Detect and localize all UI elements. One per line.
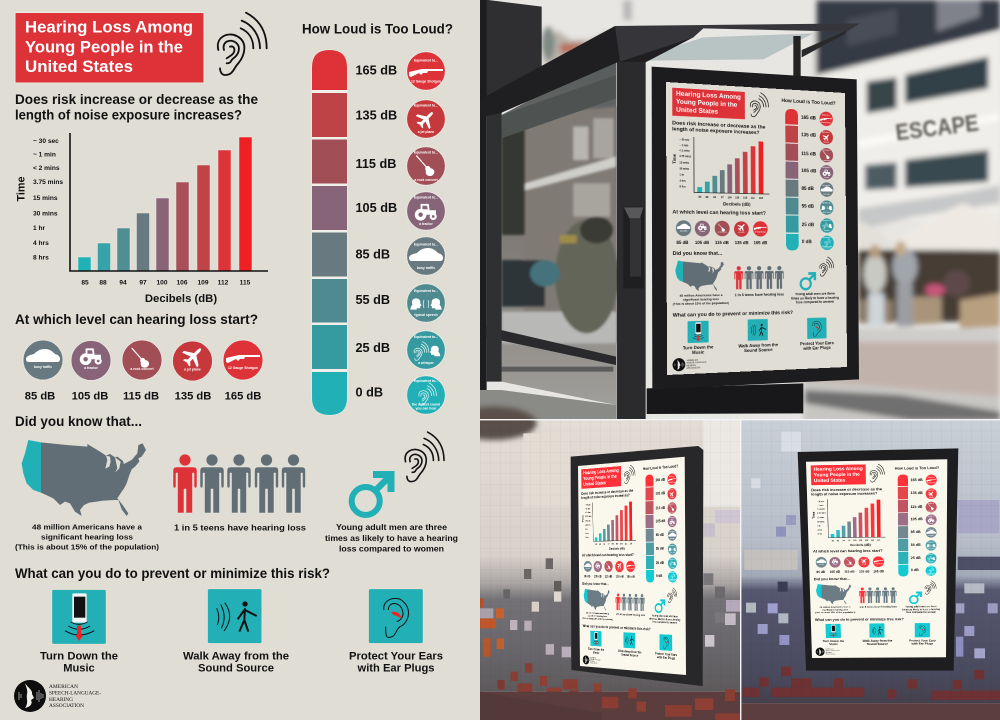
circle: car [407,237,445,275]
people pictogram [173,454,306,513]
circle: speech: typical speech [414,313,438,317]
decibel labels: 0 dB [356,386,383,400]
fact: men text [325,523,458,554]
circle: guitar: a rock concert [414,178,438,182]
main infographic poster [0,0,480,720]
circle: jet plane: a jet plane [418,130,434,134]
circle: jet plane [407,100,445,138]
title: Young People in the [25,38,183,56]
logo text: ASSOCIATION [49,703,84,709]
y axis labels: 8 hrs [33,254,49,261]
y axis labels: 4 hrs [33,240,49,247]
equivalents: loudness circles [407,52,445,414]
decibel labels: 25 dB [356,341,390,355]
axes [70,133,268,271]
y axis labels: 3.75 mins [33,179,63,186]
x axis labels: 100 [156,280,168,286]
y axis labels: 1 hr [33,225,46,232]
decibel thermometer scale [312,50,348,416]
circle: softest sound: you can hear [416,406,437,410]
circle: speech: Equivalent to... [414,289,438,293]
circle: shotgun: Equivalent to... [414,58,438,62]
poster frame right [798,448,958,671]
fact: men text: loss compared to women [339,544,444,554]
panel: walk away [183,589,289,674]
level: rock concert [122,340,162,380]
bar chart: exposure time by decibels [16,133,268,305]
icon: ear with sound waves [218,13,267,75]
heading: risk question: length of noise exposure increases? [15,108,242,122]
x axis labels: 88 [99,280,107,286]
panel: walk away: Sound Source [198,662,274,674]
circle: tractor: a tractor [419,222,433,226]
x axis labels: 112 [218,280,229,286]
logo: ASHA [14,680,101,712]
mock poster: beige tile wall [578,456,686,675]
y axis labels [33,138,63,261]
mock poster: bus shelter [666,82,847,375]
y axis labels: 15 mins [33,195,58,202]
level decibel labels: 115 dB [123,390,159,402]
panel: walk away: Walk Away from the [183,650,289,662]
heading: risk question: Does risk increase or decrease as the [15,92,258,107]
y axis labels: < 2 mins [33,165,60,172]
y axis labels: ~ 1 min [33,152,56,159]
mock poster: blue tile wall [806,459,948,658]
circle: jet plane: Equivalent to... [414,104,438,108]
circle: whisper: a whisper [418,361,435,365]
level: rock concert: a rock concert [130,367,154,371]
poster frame left [571,446,703,686]
distant building [817,32,1000,220]
decibel labels [356,64,397,400]
fact: map text: significant hearing loss [41,532,133,542]
building lettering: ESCAPE [894,110,980,146]
icon: ear [405,432,444,482]
x axis title: Decibels (dB) [145,293,217,305]
heading: risk question [15,92,258,122]
x axis labels: 94 [119,280,127,286]
circle: softest sound [407,376,445,414]
poster frame [647,383,803,414]
icon: phone with arrow [52,589,106,644]
panel: ear plugs [349,589,443,674]
scene: tiled wall with blue tones [741,420,1000,720]
level decibel labels: 85 dB [25,390,55,402]
logo text: AMERICAN [49,684,78,690]
circle: shotgun: 12 Gauge Shotgun [411,80,441,84]
shelter side glass [480,0,618,420]
icon: person walking from sound [207,589,262,644]
bars [78,137,252,271]
fact: map text: 48 million Americans have a [32,522,143,532]
heading: prevention: What can you do to prevent or minimize this risk? [15,566,330,581]
panel: turn down the music [40,589,118,674]
x axis labels: 115 [240,280,251,286]
heading: how loud: How Loud is Too Loud? [302,22,453,36]
panel: turn down the music: Music [63,662,95,674]
heading: did you know: Did you know that... [15,414,142,429]
heading: level: At which level can hearing loss start? [15,312,258,327]
circle: softest sound: the softest sound [412,402,440,406]
circle: tractor [407,192,445,230]
level: shotgun [223,340,263,380]
y axis labels: ~ 30 sec [33,138,59,145]
y axis title: Time [16,176,28,202]
icon: male symbol [352,471,394,515]
decibel labels: 135 dB [356,108,397,122]
scene: tiled wall with beige tones [450,407,740,720]
logo text [49,684,101,709]
level: tractor: a tractor [84,366,98,370]
fact: teens text: 1 in 5 teens have hearing loss [174,522,306,532]
shelter roof [646,33,813,61]
panel: ear plugs: Protect Your Ears [349,650,443,662]
level: jet plane [172,341,212,381]
circle: car: Equivalent to... [414,242,438,246]
x axis labels: 97 [139,280,147,286]
panel: ear plugs: with Ear Plugs [356,662,434,674]
circle: whisper [407,331,445,369]
title: Hearing Loss Among [25,18,193,36]
title: United States [25,57,133,76]
circle: speech [407,284,445,322]
decibel labels: 85 dB [356,248,390,262]
decibel labels: 165 dB [356,64,397,78]
fact: map text [15,522,160,552]
logo text: SPEECH-LANGUAGE- [49,690,101,696]
x axis labels: 106 [176,280,188,286]
mockup photographs: bus shelter and wall posters [480,0,1000,720]
circle: softest sound: Equivalent to... [414,379,438,383]
y axis labels: 30 mins [33,210,58,217]
decibel labels: 105 dB [356,201,397,215]
level decibel labels: 165 dB [225,390,261,402]
level decibel labels: 105 dB [72,390,108,402]
level: busy traffic: busy traffic [34,365,52,369]
level: shotgun: 12 Gauge Shotgun [228,366,258,370]
level: tractor [71,340,111,380]
fact: men text: Young adult men are three [336,523,447,532]
level decibel labels: 135 dB [175,390,211,402]
circle: car: busy traffic [417,266,435,270]
circle: whisper: Equivalent to... [414,335,438,339]
level: jet plane: a jet plane [184,368,201,372]
circle: shotgun [407,52,445,90]
circle: guitar: Equivalent to... [414,150,438,154]
scene: bus shelter street [480,0,1000,422]
x axis labels: 109 [197,280,209,286]
circle: guitar [407,147,445,185]
pedestrians [864,253,886,293]
x axis labels: 85 [81,280,89,286]
x axis labels [81,280,251,286]
map: United States [22,440,146,516]
panel: turn down the music: Turn Down the [40,650,118,662]
level decibel labels [25,390,261,402]
title [15,12,204,83]
icon row: hearing loss levels [23,340,263,381]
icon: ear with plug [368,589,423,644]
fact: map text: (This is about 15% of the population) [15,542,160,552]
circle: tractor: Equivalent to... [414,196,438,200]
decibel labels: 115 dB [356,157,396,171]
level: busy traffic [23,340,63,380]
logo text: HEARING [49,697,73,703]
decibel labels: 55 dB [356,293,390,307]
fact: men text: times as likely to have a hearing [325,534,458,543]
shelter column [617,62,646,420]
